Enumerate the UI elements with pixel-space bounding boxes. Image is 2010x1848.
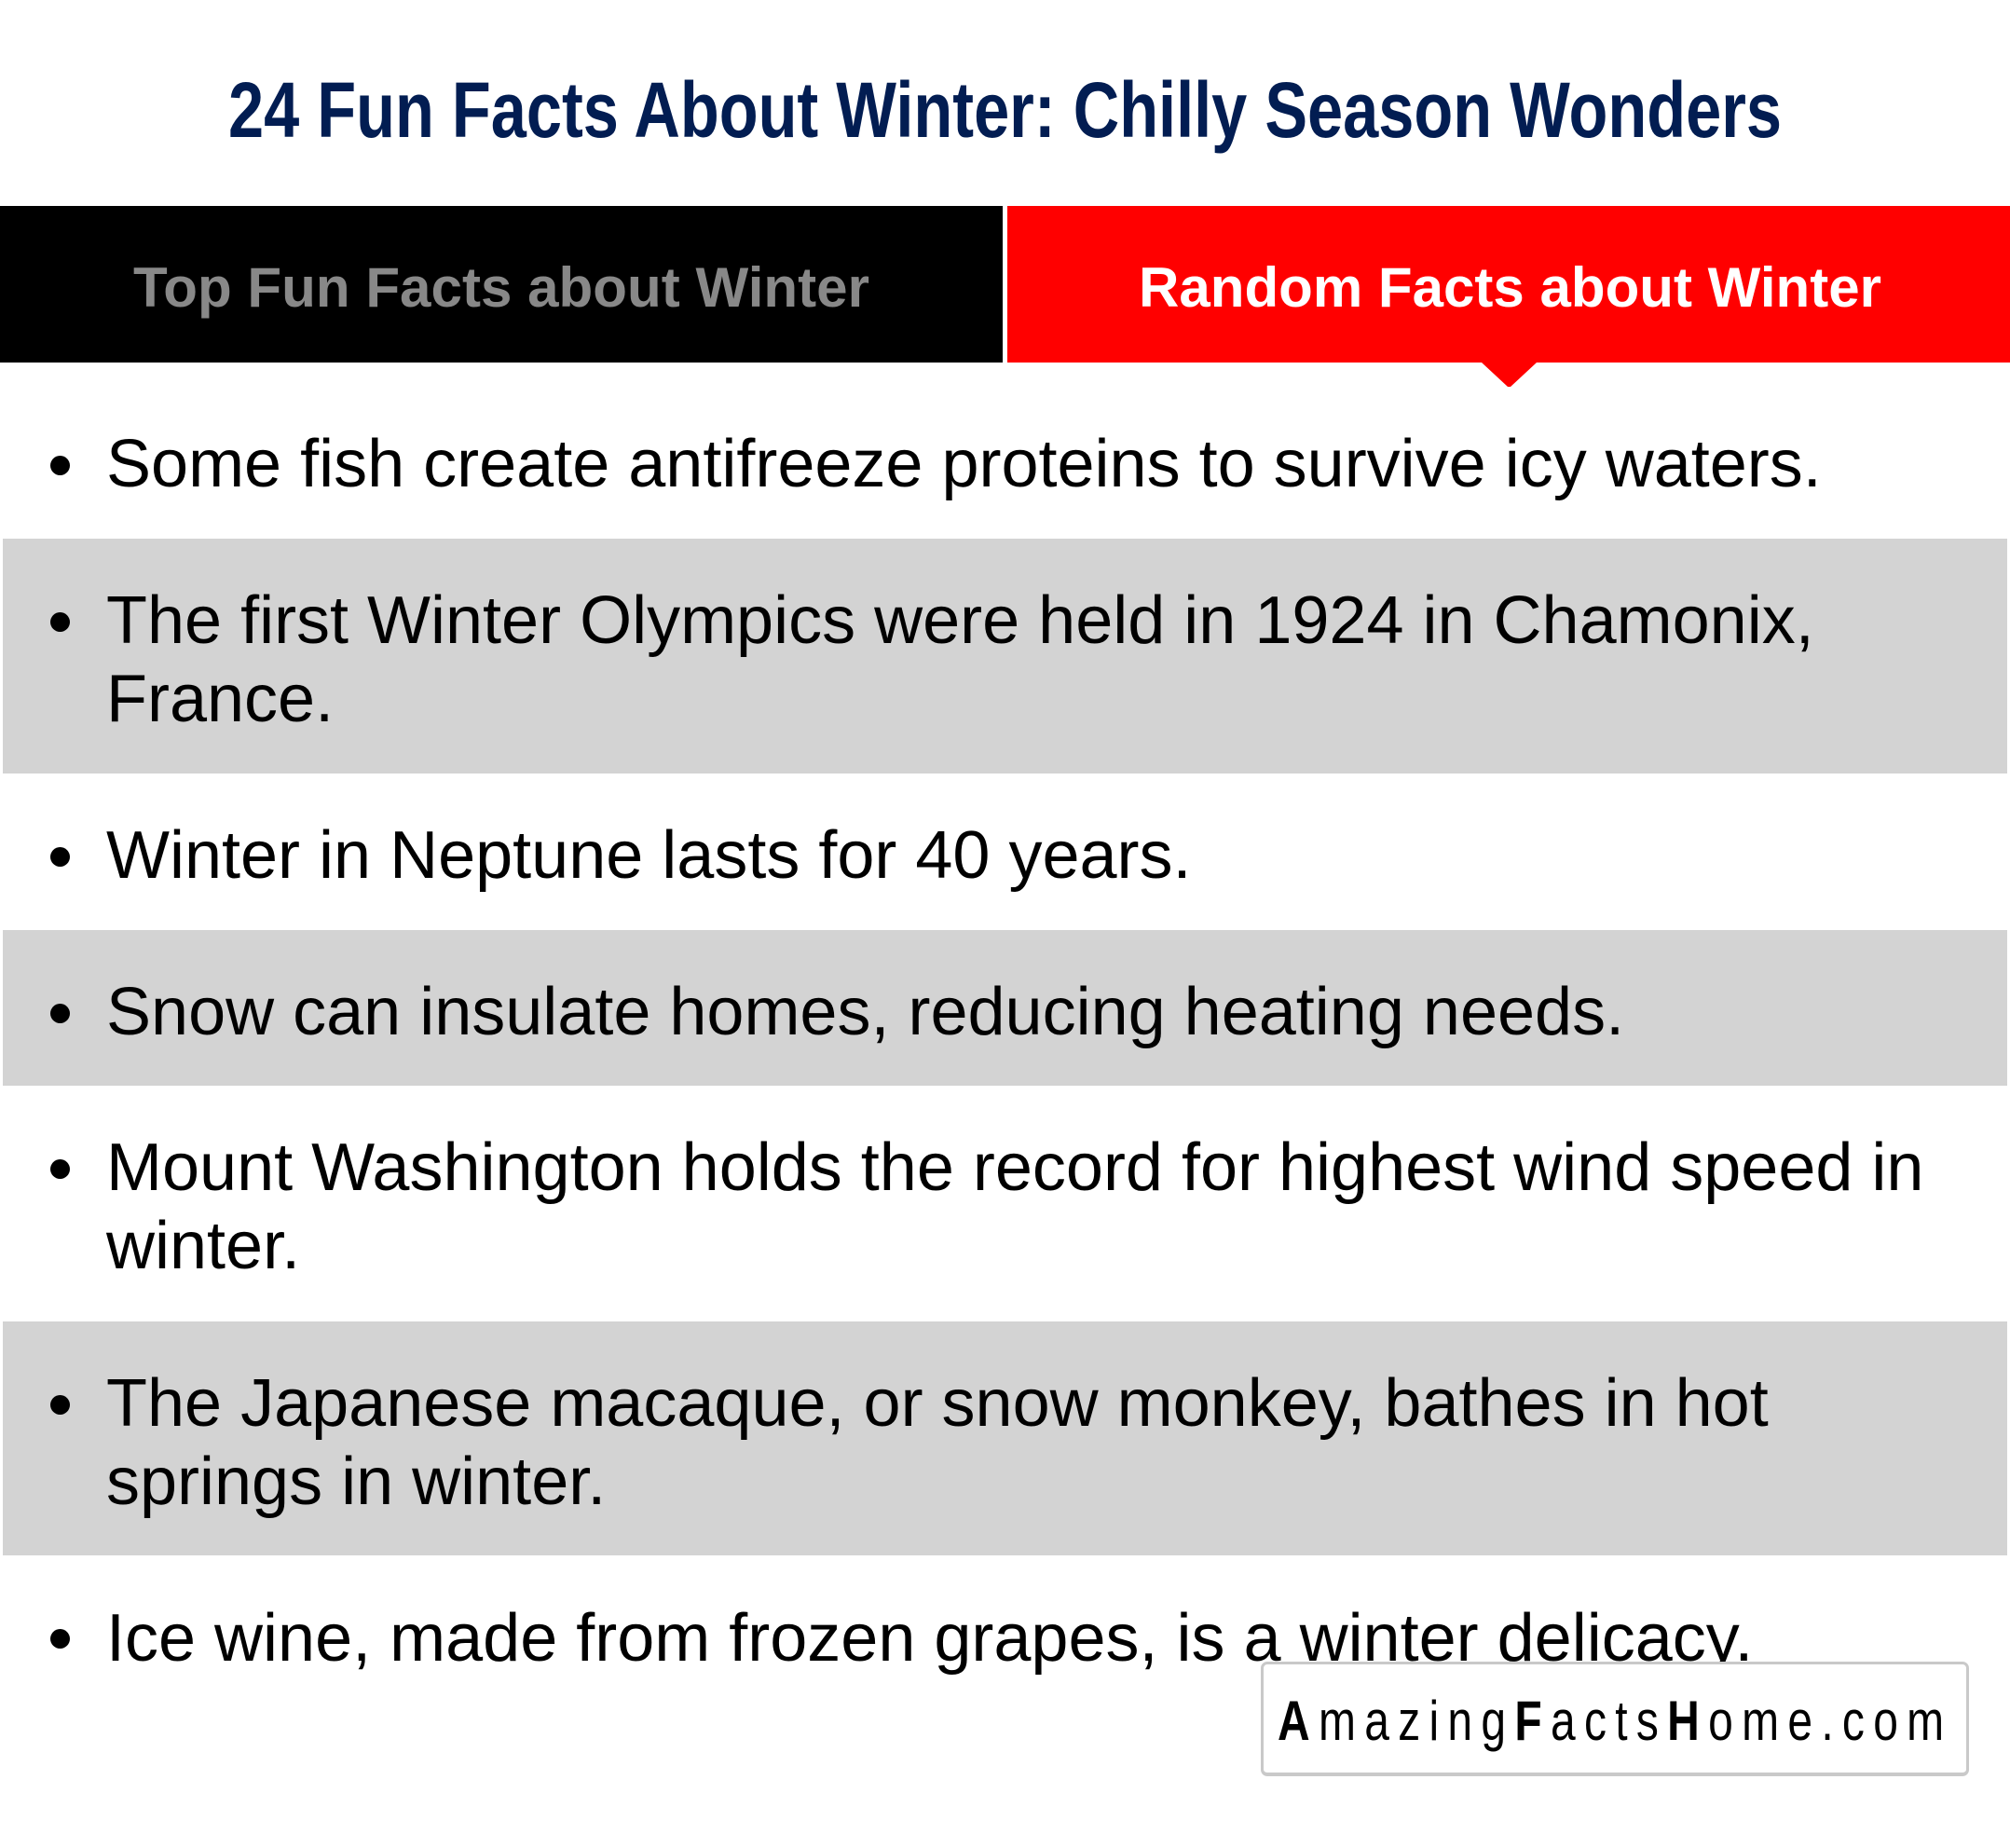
- fact row 7: Ice wine, made from frozen grapes, is a winter delicacy.: [106, 1601, 1753, 1676]
- fact row 3: Winter in Neptune lasts for 40 years.: [106, 818, 1192, 893]
- fact row 4: [3, 930, 2007, 1086]
- fact row 5: [50, 1130, 1923, 1283]
- fact row 6: [3, 1321, 2007, 1555]
- fact row 5: winter.: [106, 1209, 300, 1283]
- tab: top fun facts: Top Fun Facts about Winter: [133, 256, 869, 319]
- tab: random facts: [1007, 206, 2010, 363]
- watermark: AmazingFactsHome.com: [1278, 1690, 1952, 1752]
- fact row 1: Some fish create antifreeze proteins to survive icy waters.: [106, 427, 1822, 501]
- fact row 4: Snow can insulate homes, reducing heating needs.: [106, 975, 1624, 1049]
- fact row 2: [3, 539, 2007, 773]
- tab: random facts: Random Facts about Winter: [1139, 256, 1881, 319]
- fact row 6: springs in winter.: [106, 1444, 606, 1519]
- fact row 6: The Japanese macaque, or snow monkey, bathes in hot: [106, 1366, 1769, 1441]
- fact row 2: The first Winter Olympics were held in 1924 in Chamonix,: [106, 583, 1814, 658]
- fact row 5: Mount Washington holds the record for highest wind speed in: [106, 1130, 1923, 1205]
- watermark: [1261, 1662, 1969, 1776]
- tab: top fun facts: [0, 206, 1003, 363]
- active tab arrow: [1482, 363, 1537, 387]
- fact row 2: France.: [106, 662, 334, 736]
